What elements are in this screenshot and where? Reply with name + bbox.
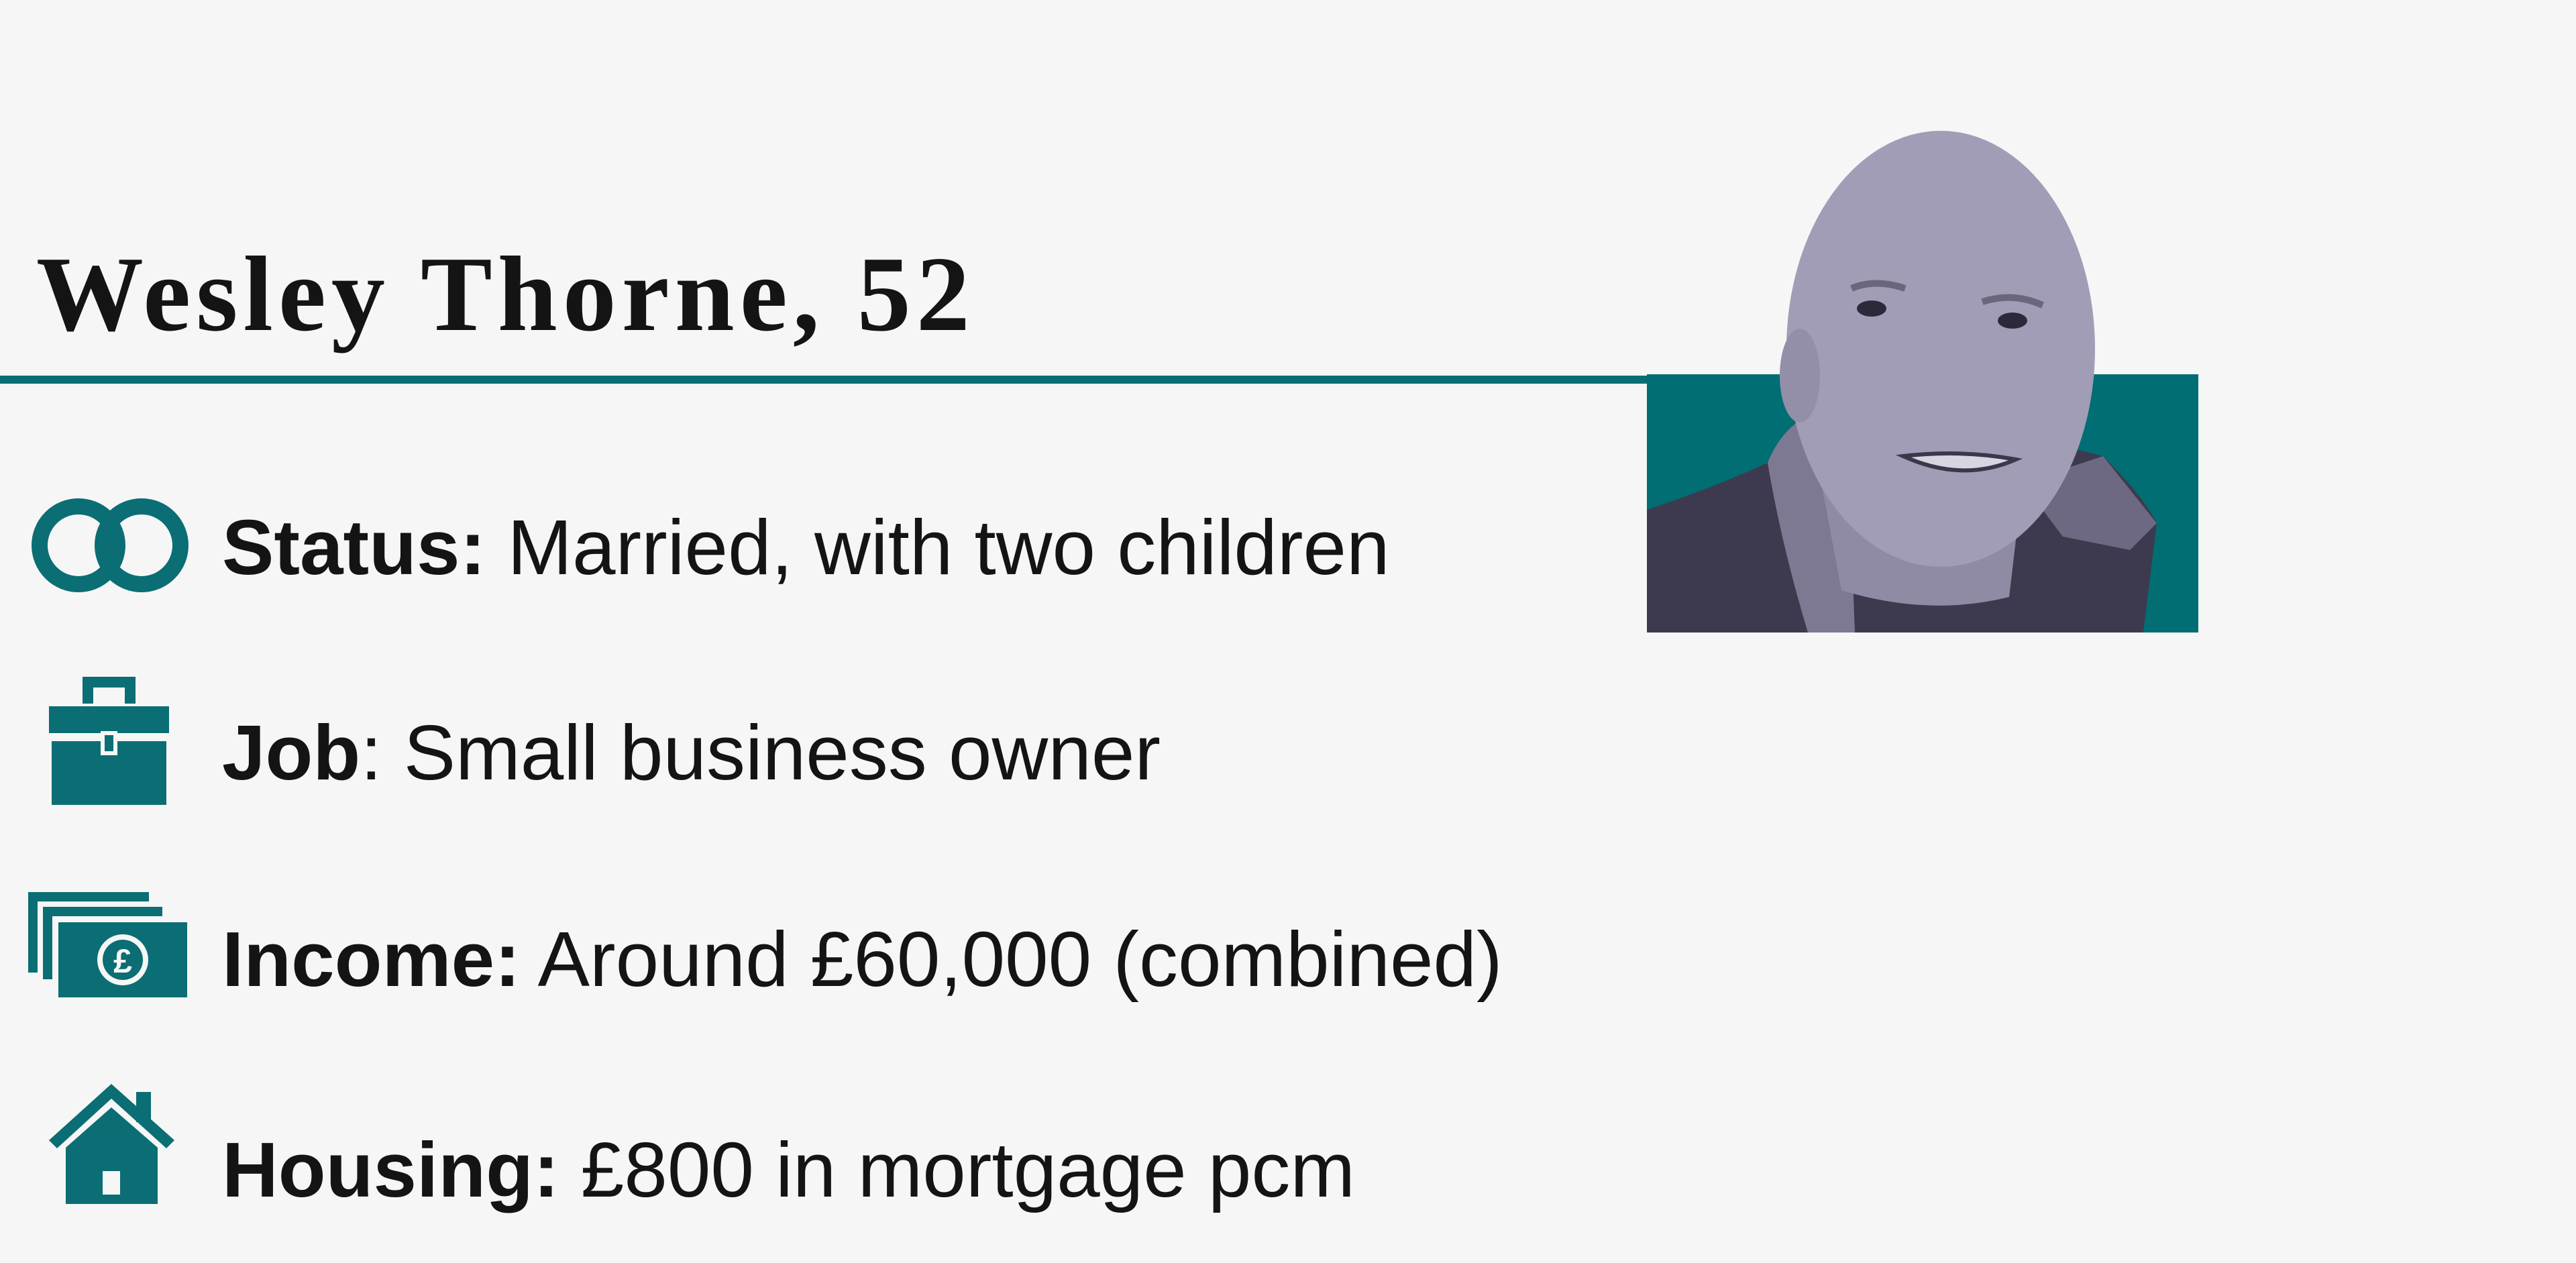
photo panel [1647,131,2198,633]
teal underline [0,376,1650,384]
job row: Job: Small business owner [222,709,1161,796]
housing row: Housing: £800 in mortgage pcm [222,1126,1355,1213]
icon: briefcase [49,677,169,805]
icon: banknote [28,892,187,997]
icon: rings [32,498,189,592]
icon: banknote: £ [113,942,132,980]
income row: Income: Around £60,000 (combined) [222,916,1503,1003]
title: Wesley Thorne, 52 [36,234,975,353]
status row: Status: Married, with two children [222,504,1390,591]
icon: house [49,1084,174,1204]
